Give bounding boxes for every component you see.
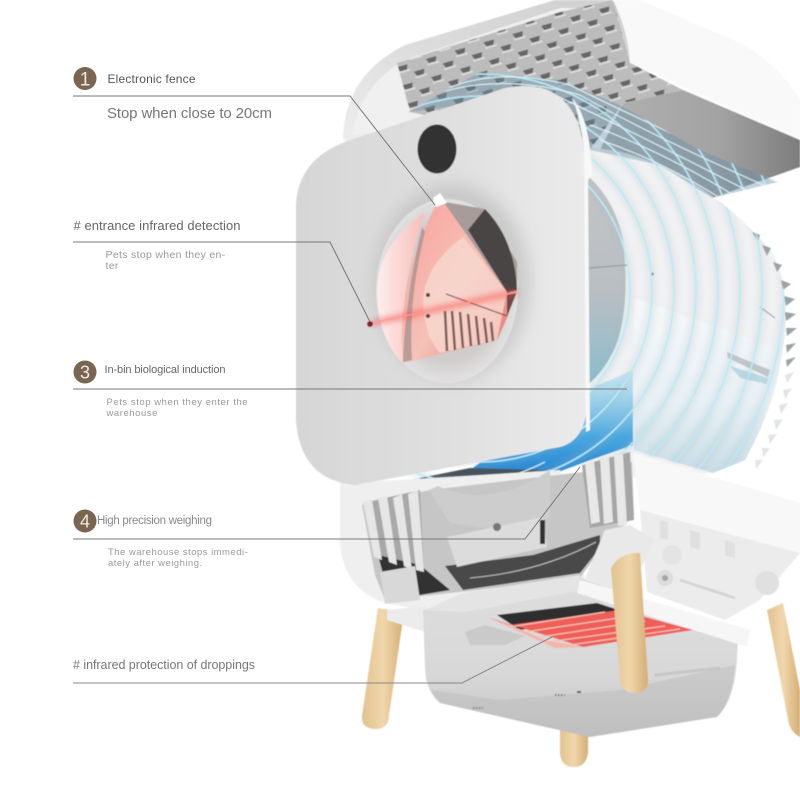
right fin cavity [582,452,634,528]
drawer dots [473,695,565,708]
blue glow [470,370,633,490]
heading 3: In-bin biological induction [104,364,226,376]
taupe inner band [403,227,425,362]
description 1: Stop when close to 20cm [107,105,272,122]
number badge 3: 3 [80,362,90,382]
heading 4: High precision weighing [97,515,212,527]
leader line 2 [73,242,370,322]
infrared tray [487,610,693,647]
weighing box [447,517,547,567]
dark tray opening [497,603,625,630]
description 4: The warehouse stops immedi- [108,547,248,558]
front leg [611,553,648,693]
sensing mesh background [400,72,778,505]
leader line 5 [73,637,552,683]
base interior [362,462,634,600]
waste drawer [387,575,750,737]
number badge 4: 4 [80,512,90,532]
leader line 4 [73,467,580,539]
description 2: Pets stop when they en- [106,249,226,261]
description 4: ately after weighing. [108,558,203,569]
foot bracket [585,525,655,590]
inner grey crescent [578,175,626,392]
translucent window [634,298,782,473]
right fins [585,454,627,526]
description 3: Pets stop when they enter the [106,397,248,408]
entrance opening [367,184,530,383]
dark cavity [378,555,450,600]
emitter dot [367,321,373,327]
right white block [633,453,800,553]
red wedge [402,197,507,363]
sensor window [418,124,456,174]
pink left lobe [377,212,425,363]
interior wall [600,90,800,198]
number badge 1 [74,67,96,90]
wooden legs [362,603,800,767]
label 5: infrared protection of droppings: # infrared protection of droppings [73,658,255,672]
honeycomb ceiling [397,0,683,150]
label 2: entrance infrared detection [74,218,240,272]
drum [470,148,797,490]
description 2: ter [106,260,119,272]
label 4: high precision weighing [74,510,248,569]
leader line 1 [73,96,435,205]
drawer handle recess [465,625,525,645]
dark interior [468,209,517,292]
drum teeth [752,232,797,367]
sensing wave arcs [410,72,786,480]
top lip [425,575,582,612]
leader line 3 [73,388,627,390]
label 3: in-bin biological induction [74,360,248,419]
left white shell [340,470,585,612]
number badge 1: 1 [80,70,90,90]
handle slot [730,366,768,384]
laser beam [372,292,517,323]
illustration: litter box product [296,0,800,768]
left fin cavity [363,490,424,572]
left cylinder part [380,566,420,604]
right underside [640,510,800,620]
back middle leg [560,730,588,767]
label 1: electronic fence [74,67,272,122]
cream disc [423,237,507,353]
inner markers [426,293,430,297]
heading 1: Electronic fence [108,72,196,86]
number badge 4 [74,510,96,532]
top right white cover [613,0,800,140]
front panel [296,86,592,485]
left fins [363,490,424,572]
lower drawer shade [432,665,735,737]
rear top shell [343,0,800,198]
left bracket [387,606,425,632]
drum seam [589,265,775,318]
back left leg [362,608,404,729]
dark band under mechanism [445,535,600,590]
white rim [577,580,750,647]
top emitter [433,193,447,207]
back right leg [767,603,800,737]
lower body [340,452,800,620]
vent slats [445,311,493,351]
heading 2: # entrance infrared detection [74,218,240,233]
number badge 3 [74,360,96,384]
description 3: warehouse [106,408,158,419]
weighing cradle [429,470,550,530]
taupe interior [420,202,517,353]
